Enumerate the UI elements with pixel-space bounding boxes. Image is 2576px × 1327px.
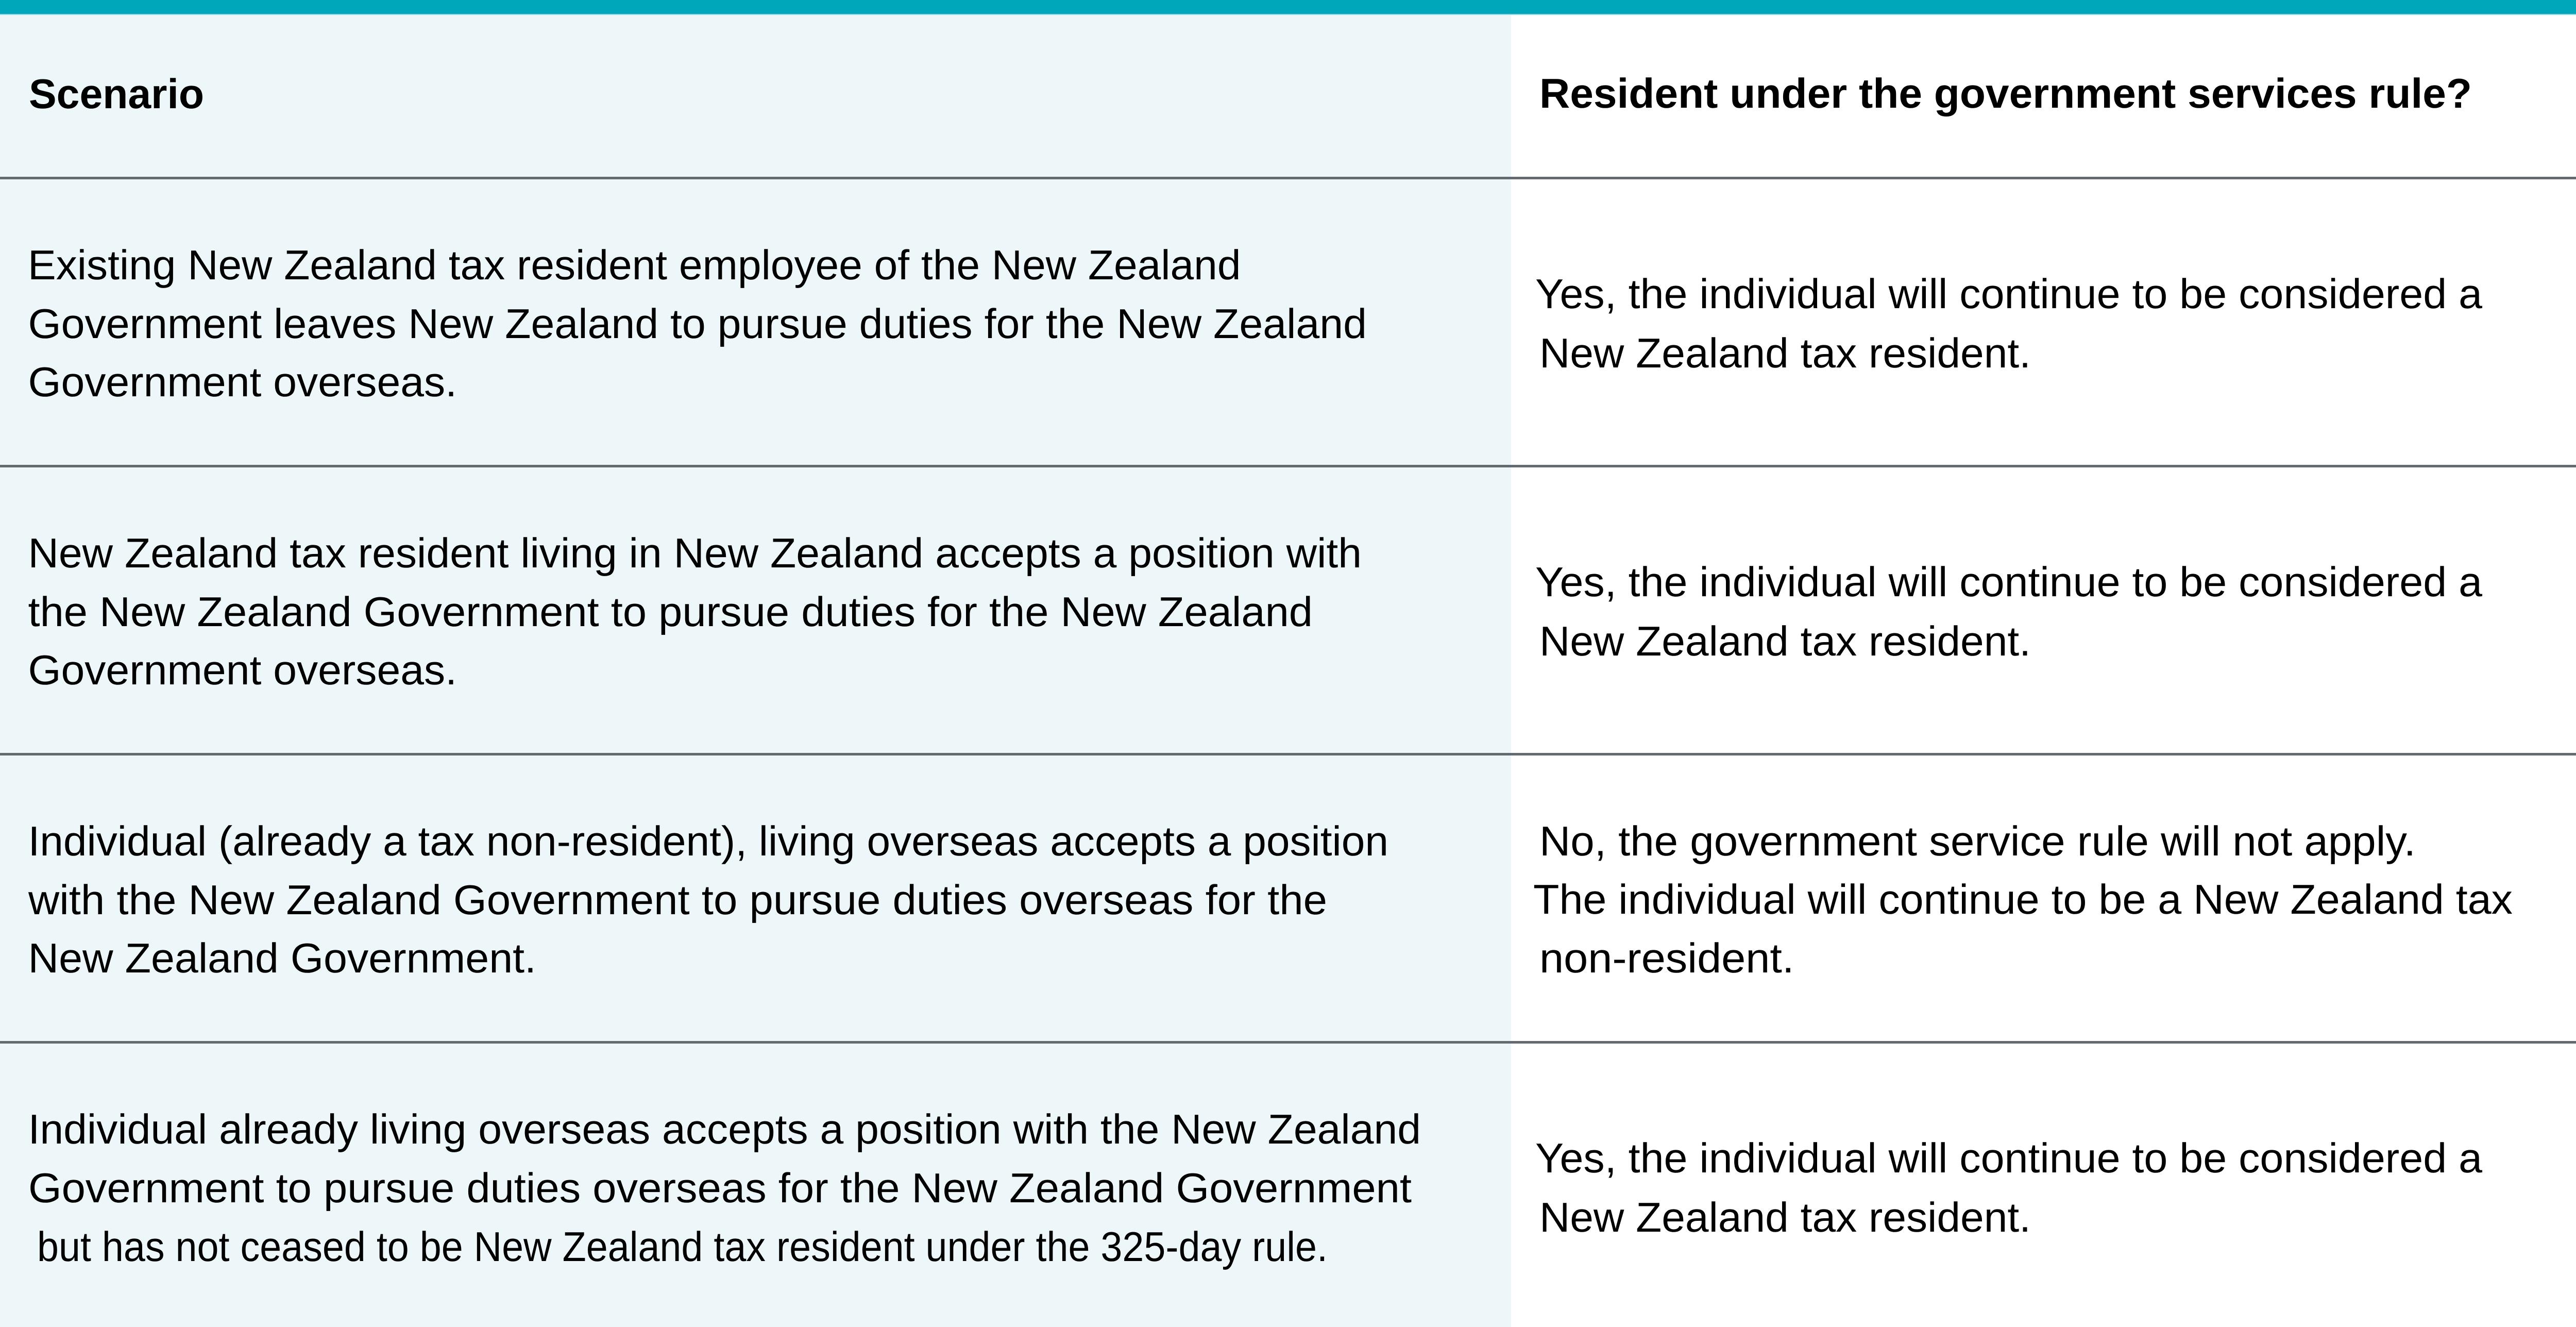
row 1 (28, 242, 2483, 406)
text block: scenario 4: Government to pursue duties overseas for the New Zealand Government (28, 1165, 1412, 1212)
text block: scenario 2: the New Zealand Government to pursue duties for the New Zealand (28, 589, 1313, 635)
text block: scenario 4: Individual already living overseas accepts a position with the New Zealand (28, 1106, 1421, 1153)
top teal bar (0, 0, 2576, 14)
row 4 (28, 1106, 2483, 1270)
text block: scenario 1: Existing New Zealand tax resident employee of the New Zealand (28, 242, 1241, 289)
text block: answer 1 (1535, 271, 2483, 377)
text block: answer 4: New Zealand tax resident. (1539, 1195, 2031, 1241)
text block: answer 1: New Zealand tax resident. (1539, 330, 2031, 377)
row 3 (28, 818, 2513, 982)
text block: scenario 1: Government overseas. (28, 359, 457, 406)
heading: Resident under the government services rule?: Resident under the government services rule? (1539, 71, 2472, 117)
text block: answer 3 (1533, 818, 2513, 982)
text block: answer 3: non-resident. (1539, 935, 1794, 982)
text block: scenario 3 (28, 818, 1388, 982)
text block: answer 1: Yes, the individual will continue to be considered a (1535, 271, 2483, 317)
text block: answer 2 (1535, 559, 2483, 665)
header row (29, 71, 2472, 117)
heading: Scenario: Scenario (29, 71, 204, 117)
text block: answer 4 (1535, 1135, 2483, 1241)
text block: scenario 3: with the New Zealand Government to pursue duties overseas for the (28, 877, 1327, 923)
text block: scenario 1 (28, 242, 1367, 406)
text block: answer 4: Yes, the individual will continue to be considered a (1535, 1135, 2483, 1182)
panel: scenario column background (0, 14, 1511, 1327)
text block: scenario 4 (28, 1106, 1421, 1270)
text block: answer 2: New Zealand tax resident. (1539, 618, 2031, 665)
row 2 (28, 530, 2483, 694)
text block: answer 3: No, the government service rule will not apply. (1539, 818, 2416, 865)
text block: scenario 2 (28, 530, 1362, 694)
text block: scenario 2: Government overseas. (28, 647, 457, 694)
text block: answer 2: Yes, the individual will continue to be considered a (1535, 559, 2483, 606)
text block: scenario 1: Government leaves New Zealand to pursue duties for the New Zealand (28, 301, 1367, 347)
text block: scenario 3: New Zealand Government. (28, 935, 536, 982)
text block: scenario 4: but has not ceased to be New Zealand tax resident under the 325-day rule. (37, 1224, 1328, 1270)
text block: answer 3: The individual will continue to be a New Zealand tax (1533, 877, 2513, 923)
text block: scenario 2: New Zealand tax resident living in New Zealand accepts a position with (28, 530, 1362, 577)
text block: scenario 3: Individual (already a tax non-resident), living overseas accepts a position (28, 818, 1388, 865)
